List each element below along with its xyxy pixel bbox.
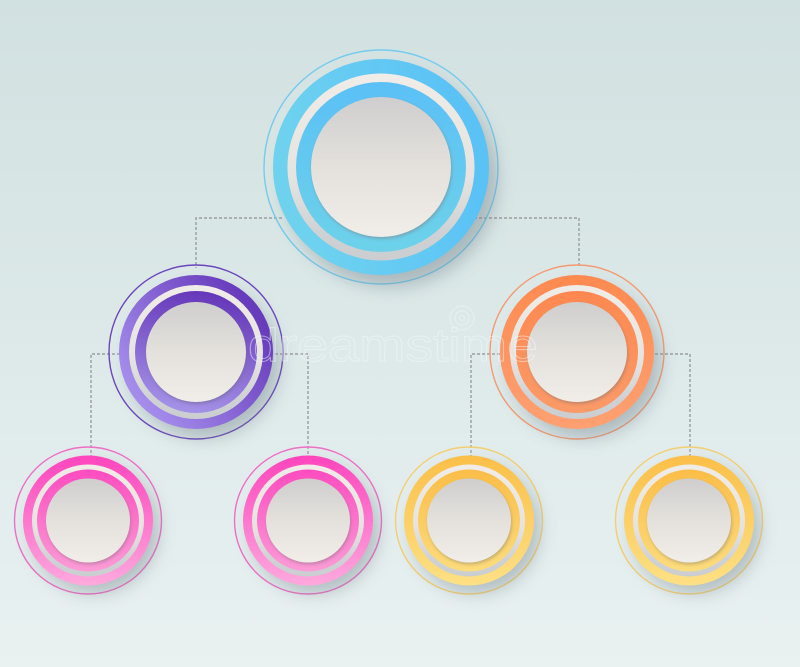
node: top blue xyxy=(264,50,498,287)
connector lines xyxy=(91,218,690,456)
watermark: dreamstime xyxy=(248,319,538,371)
node: orange xyxy=(490,265,664,439)
node: pink left xyxy=(14,447,162,594)
node: yellow right xyxy=(616,447,762,594)
node: yellow left xyxy=(396,447,542,594)
watermark xyxy=(248,306,538,371)
node: pink right xyxy=(234,447,382,594)
node: purple xyxy=(109,265,283,439)
